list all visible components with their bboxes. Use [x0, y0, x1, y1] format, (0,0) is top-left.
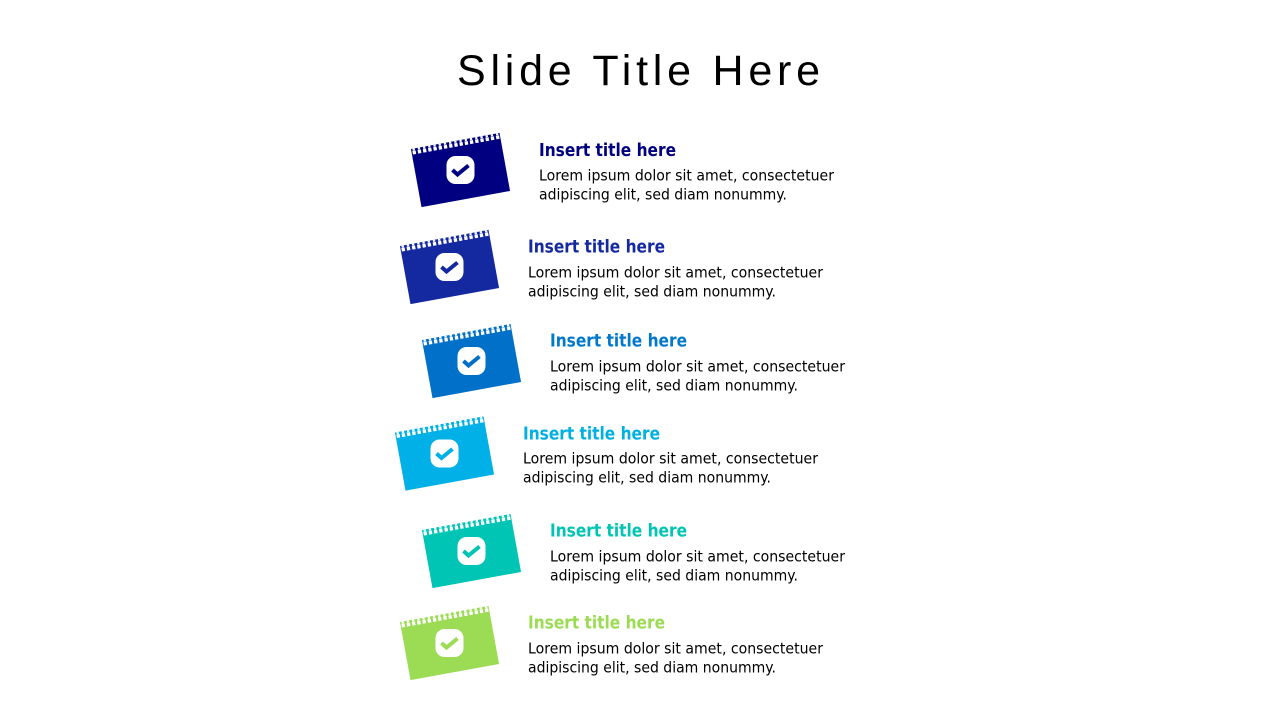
item text 2 — [528, 238, 824, 300]
item 1 — [411, 133, 835, 207]
icon: sky blue notepad with check — [395, 416, 494, 491]
item text 5: Insert title here — [550, 522, 687, 542]
icon: blue notepad with check — [422, 324, 521, 398]
item text 1: Insert title here — [539, 141, 676, 161]
item text 4: Lorem ipsum dolor sit amet, consectetuer — [523, 450, 819, 468]
icon: navy notepad with check — [411, 133, 510, 207]
item text 6: adipiscing elit, sed diam nonummy. — [528, 658, 776, 676]
item text 2: Insert title here — [528, 238, 665, 258]
item 6 — [400, 606, 824, 680]
item text 4: adipiscing elit, sed diam nonummy. — [523, 468, 771, 486]
item text 4: Insert title here — [523, 424, 660, 444]
item text 1: Lorem ipsum dolor sit amet, consectetuer — [539, 166, 835, 184]
item 4 — [395, 416, 819, 491]
item text 3 — [550, 332, 846, 394]
item 5 — [422, 514, 846, 588]
title: Slide Title Here — [457, 47, 820, 95]
icon: green notepad with check — [400, 606, 499, 680]
item 2 — [400, 230, 824, 304]
item text 4 — [523, 424, 819, 486]
item text 1 — [539, 141, 835, 204]
item text 1: adipiscing elit, sed diam nonummy. — [539, 186, 787, 204]
item text 2: Lorem ipsum dolor sit amet, consectetuer — [528, 264, 824, 282]
item text 2: adipiscing elit, sed diam nonummy. — [528, 282, 776, 300]
item text 3: Insert title here — [550, 332, 687, 352]
item text 5: Lorem ipsum dolor sit amet, consectetuer — [550, 548, 846, 566]
item text 6: Lorem ipsum dolor sit amet, consectetuer — [528, 640, 824, 658]
icon: teal notepad with check — [422, 514, 521, 588]
icon: royal blue notepad with check — [400, 230, 499, 304]
item text 5: adipiscing elit, sed diam nonummy. — [550, 566, 798, 584]
item text 3: adipiscing elit, sed diam nonummy. — [550, 376, 798, 394]
item text 3: Lorem ipsum dolor sit amet, consectetuer — [550, 358, 846, 376]
item text 6 — [528, 614, 824, 676]
item 3 — [422, 324, 846, 398]
item text 6: Insert title here — [528, 614, 665, 634]
item text 5 — [550, 522, 846, 584]
